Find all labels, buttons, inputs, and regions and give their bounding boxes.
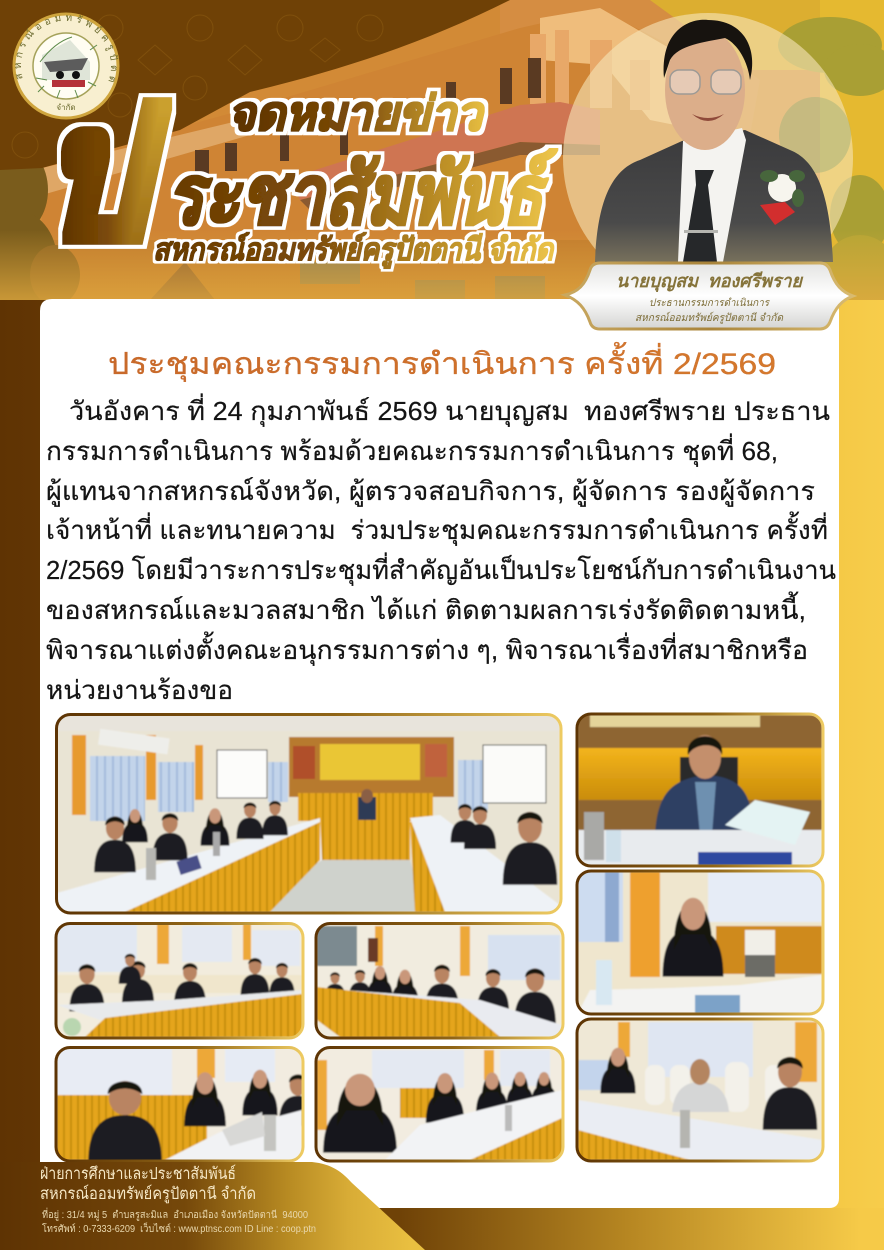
- photo: woman at table: [577, 871, 823, 1014]
- tree left: [0, 168, 80, 300]
- heading: ประชุมคณะกรรมการดำเนินการ ครั้งที่ 2/2569: [108, 342, 776, 383]
- portrait circle: [563, 13, 853, 303]
- body text: หน่วยงานร้องขอ: [46, 675, 233, 705]
- body text: ของสหกรณ์และมวลสมาชิก ได้แก่ ติดตามผลการเร่งรัดติดตามหนี้,: [46, 591, 806, 625]
- footer: สหกรณ์ออมทรัพย์ครูปัตตานี จำกัด: [40, 1184, 256, 1204]
- footer: โทรศัพท์ : 0-7333-6209 เว็บไซต์ : www.ptnsc.com ID Line : coop.ptn: [42, 1221, 316, 1235]
- photo: three attendees: [577, 1019, 823, 1161]
- title: letter pho pla: ป: [44, 74, 167, 275]
- photo: staff row right: [316, 1048, 563, 1161]
- photo: full meeting room: [56, 714, 561, 913]
- tree right: [778, 17, 884, 315]
- title: newsletter: จดหมายข่าว: [228, 88, 485, 141]
- brown top-left sweep with ornaments: [0, 0, 510, 170]
- body text: ผู้แทนจากสหกรณ์จังหวัด, ผู้ตรวจสอบกิจการ, ผู้จัดการ รองผู้จัดการ: [46, 476, 815, 507]
- photo: staff row left: [56, 1048, 317, 1163]
- body text: วันอังคาร ที่ 24 กุมภาพันธ์ 2569 นายบุญสม ทองศรีพราย ประธาน: [69, 393, 830, 427]
- subtitle: สหกรณ์ออมทรัพย์ครูปัตตานี จำกัด: [153, 232, 555, 269]
- footer: ฝ่ายการศึกษาและประชาสัมพันธ์: [40, 1164, 236, 1183]
- photo: chairman at table: [577, 714, 823, 866]
- portrait: chairman: [595, 20, 833, 262]
- body text: [46, 393, 836, 705]
- body text: พิจารณาแต่งตั้งคณะอนุกรรมการต่าง ๆ, พิจารณาเรื่องที่สมาชิกหรือ: [46, 631, 808, 666]
- white content panel: [40, 299, 839, 1208]
- footer: ที่อยู่ : 31/4 หมู่ 5 ตำบลรูสะมิแล อำเภอเมือง จังหวัดปัตตานี 94000: [42, 1207, 308, 1221]
- body text: เจ้าหน้าที่ และทนายความ ร่วมประชุมคณะกรรมการดำเนินการ ครั้งที่: [46, 511, 828, 546]
- body text: กรรมการดำเนินการ พร้อมด้วยคณะกรรมการดำเนินการ ชุดที่ 68,: [46, 433, 778, 467]
- name badge: นายบุญสม ทองศรีพราย: [616, 271, 803, 293]
- name badge: [565, 263, 853, 329]
- title: public relations: ระชาสัมพันธ์: [167, 148, 558, 242]
- photo: committee row left: [56, 924, 303, 1038]
- name badge: สหกรณ์ออมทรัพย์ครูปัตตานี จำกัด: [635, 311, 784, 324]
- footer: [0, 1162, 425, 1250]
- logo: จำกัด: [56, 103, 76, 112]
- header background: building photo: [0, 0, 884, 315]
- name badge: ประธานกรรมการดำเนินการ: [649, 297, 770, 309]
- body text: 2/2569 โดยมีวาระการประชุมที่สำคัญอันเป็นประโยชน์กับการดำเนินงาน: [46, 552, 836, 586]
- band below panel: [340, 1208, 884, 1250]
- photo: committee row right: [316, 924, 563, 1038]
- logo: [12, 12, 120, 120]
